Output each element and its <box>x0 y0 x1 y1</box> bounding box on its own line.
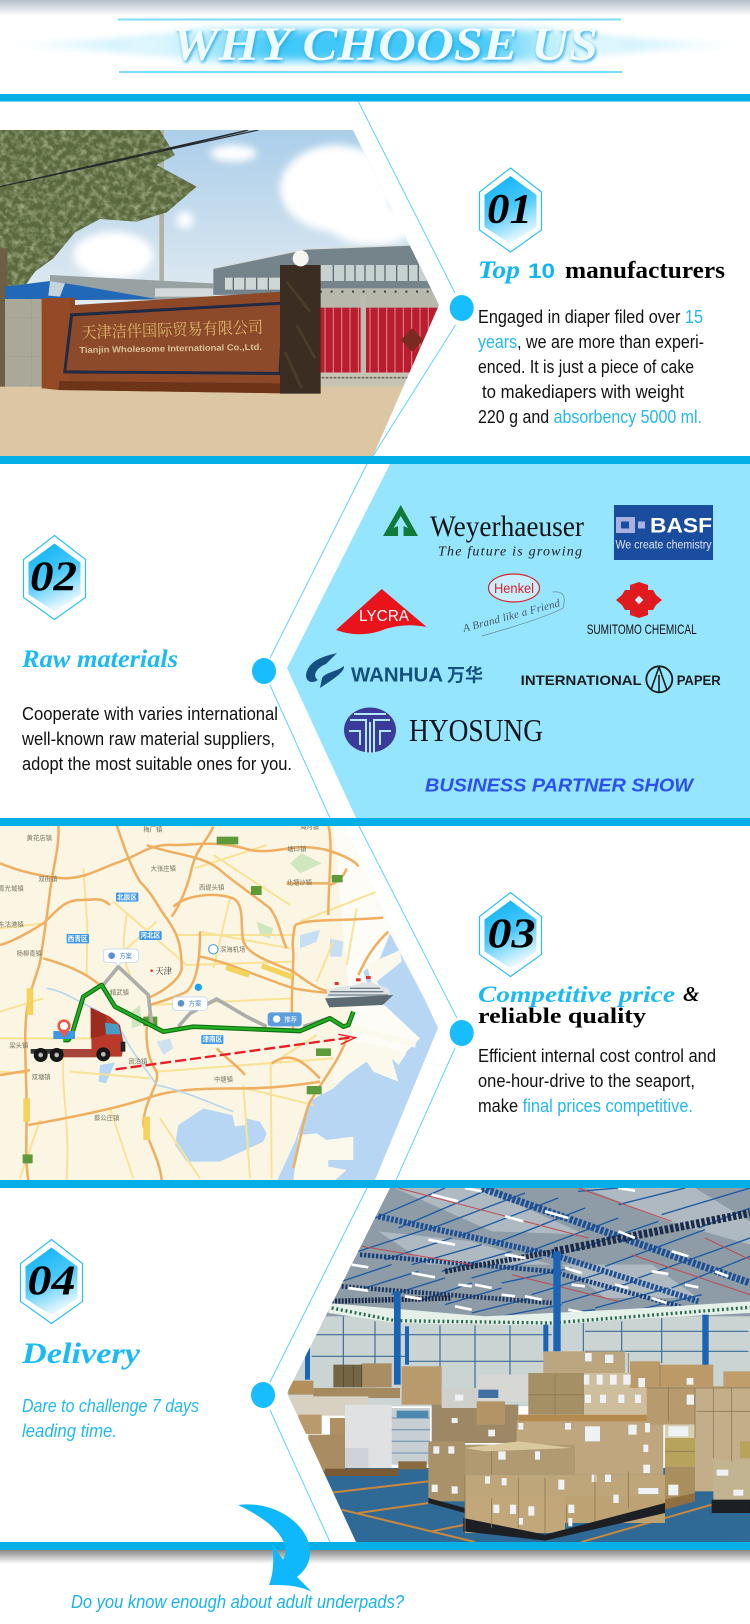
logo: International Paper: PAPER <box>677 672 721 688</box>
map place labels: 梁头镇 <box>9 1041 29 1050</box>
sign text <box>79 318 263 355</box>
map place labels: 西堤头镇 <box>199 882 225 891</box>
heading: reliable quality: reliable quality <box>478 1003 646 1028</box>
port land <box>353 1025 417 1048</box>
section 2 connector line and dot <box>252 464 367 818</box>
map district badges <box>67 892 223 1044</box>
map place labels: 双街镇 <box>38 874 58 883</box>
caption: business partner show: BUSINESS PARTNER SHOW <box>425 775 695 796</box>
purlins <box>342 1188 750 1316</box>
map district badges: 河北区 <box>140 931 161 940</box>
logo: Weyerhaeuser: Weyerhaeuser <box>430 510 584 543</box>
sign text: 天津洁伴国际贸易有限公司 <box>81 318 263 342</box>
water <box>99 930 440 1182</box>
body text: to makediapers with weight <box>482 382 684 402</box>
body text: make final prices competitive. <box>478 1096 693 1116</box>
map place labels: 精武镇 <box>110 987 130 996</box>
section 4 text panel <box>20 1240 199 1441</box>
pallet stacks <box>288 1351 750 1541</box>
ground <box>0 386 404 456</box>
route badges: 推荐 <box>284 1015 298 1024</box>
body text: Engaged in diaper filed over 15 <box>478 307 703 327</box>
hexagon 04: 04 <box>27 1258 76 1304</box>
hexagon 04 <box>20 1240 82 1324</box>
pin <box>53 1019 75 1039</box>
wall <box>285 1316 750 1406</box>
body text: 220 g and absorbency 5000 ml. <box>478 407 702 427</box>
body text: enced. It is just a piece of cake <box>478 357 694 377</box>
logo: Lycra <box>336 589 427 634</box>
logo: International Paper: INTERNATIONAL <box>521 672 642 688</box>
map place labels: 杨柳青镇 <box>17 949 43 958</box>
hexagon 01: 01 <box>487 187 532 233</box>
map district badges: 北辰区 <box>117 892 137 901</box>
carton labels <box>432 1353 743 1526</box>
ceiling lights <box>348 1188 728 1317</box>
title: WHY CHOOSE US <box>172 18 598 71</box>
heading: top 10 manufacturers <box>478 257 725 284</box>
heading: competitive price: Competitive price <box>478 982 675 1007</box>
section 3 map <box>0 822 447 1182</box>
left grey wall <box>5 299 43 389</box>
tree <box>0 125 197 392</box>
hexagon 03: 03 <box>487 912 536 958</box>
map place labels: 塘口镇 <box>287 844 307 853</box>
back left building <box>50 275 213 300</box>
highway shields <box>23 837 343 1163</box>
section 4 photo: warehouse <box>285 1188 750 1545</box>
route badges: 方案 <box>189 999 202 1008</box>
wall ribs <box>312 1316 748 1388</box>
map place labels: 黄花店镇 <box>27 833 53 842</box>
grey alternative routes <box>103 967 330 1027</box>
body text: well-known raw material suppliers, <box>21 729 275 749</box>
columns <box>305 1251 709 1385</box>
section 1 photo: factory gate <box>0 125 443 462</box>
green areas <box>132 853 322 1028</box>
map place labels: 梅厂镇 <box>143 825 163 834</box>
trusses <box>332 1188 750 1308</box>
body text: years, we are more than experi- <box>478 332 704 352</box>
minor roads <box>0 845 377 1180</box>
stack edges <box>465 1353 750 1533</box>
bottom shadow band <box>0 1550 750 1564</box>
body text: adopt the most suitable ones for you. <box>22 754 292 774</box>
body text <box>22 1396 199 1441</box>
logo: Henkel: Henkel <box>494 580 534 596</box>
logo: Wanhua: WANHUA <box>351 665 443 687</box>
heading: top 10 manufacturers: 10 <box>528 260 555 283</box>
body text: Dare to challenge 7 days <box>22 1396 199 1416</box>
route badges: 方案 <box>119 951 133 960</box>
map place labels: 北塘沙镇 <box>287 877 313 886</box>
closing question: Do you know enough about adult underpads? <box>71 1592 404 1612</box>
blue roof <box>5 281 157 301</box>
logo: Wanhua: 万华 <box>447 666 483 686</box>
map place labels: 蔡公庄镇 <box>94 1113 120 1122</box>
logo: Sumitomo Chemical <box>587 582 697 637</box>
map place labels: 大张庄镇 <box>151 864 177 873</box>
main grey building <box>213 245 443 295</box>
red pipes <box>362 1188 750 1301</box>
eave band <box>328 1301 750 1325</box>
hexagon 03 <box>480 892 542 976</box>
sign text: Tianjin Wholesome International Co.,Ltd. <box>79 342 262 355</box>
icon: red truck <box>31 1008 125 1062</box>
logo: International Paper <box>521 666 721 692</box>
map place labels: 双塘镇 <box>32 1072 51 1081</box>
logo: Weyerhaeuser <box>383 505 584 560</box>
section 2 partner panel <box>287 464 750 818</box>
map district badges: 津南区 <box>202 1035 223 1044</box>
heading: raw materials: Raw materials <box>21 646 178 673</box>
logo: BASF <box>614 505 713 560</box>
section 3 text panel <box>478 892 716 1116</box>
major roads <box>0 825 388 1180</box>
wall and sign <box>42 292 286 393</box>
logo: BASF: We create chemistry <box>616 540 712 552</box>
logo: Hyosung <box>344 708 543 753</box>
body text <box>478 307 704 427</box>
logo: BASF: BASF <box>650 515 712 538</box>
title glow <box>0 30 750 61</box>
map place labels <box>0 822 320 1122</box>
logo: Hyosung: HYOSUNG <box>409 712 543 748</box>
map place labels: 团泊镇 <box>128 1056 148 1065</box>
section 2 text panel <box>21 536 292 774</box>
route badges <box>103 949 302 1026</box>
logo: Sumitomo Chemical: SUMITOMO CHEMICAL <box>587 621 697 637</box>
gate column <box>280 265 321 394</box>
map place labels: 海河镇 <box>300 822 320 831</box>
title rules <box>118 20 622 72</box>
logo: Lycra: LYCRA <box>359 608 409 625</box>
heading: delivery: Delivery <box>21 1337 141 1370</box>
body text: Cooperate with varies international <box>22 704 278 724</box>
logo: Wanhua <box>306 653 483 688</box>
red dashed arrow <box>116 1037 352 1069</box>
body text: one-hour-drive to the seaport, <box>478 1071 695 1091</box>
heading: top 10 manufacturers: manufacturers <box>565 258 725 284</box>
arrow pointing down <box>238 1504 312 1592</box>
map place labels: 天津 <box>155 966 173 976</box>
icon: cruise ship <box>325 976 393 1007</box>
body text: leading time. <box>22 1421 117 1441</box>
hexagon 02: 02 <box>30 554 77 600</box>
section 4 connector line and dot <box>251 1188 367 1542</box>
hexagon 01 <box>480 168 542 252</box>
map place labels: 中塘镇 <box>214 1075 234 1084</box>
header band <box>0 0 750 72</box>
map district badges: 西青区 <box>68 934 88 943</box>
body text <box>21 704 292 774</box>
ampersand: & <box>683 982 700 1006</box>
logo: Henkel: A Brand like a Friend <box>461 597 562 635</box>
hexagon 02 <box>24 536 86 620</box>
roof panels <box>378 1188 750 1298</box>
body text <box>478 1046 716 1116</box>
body text: Efficient internal cost control and <box>478 1046 716 1066</box>
gate <box>318 288 443 308</box>
section 3 connector line and dot <box>359 826 474 1180</box>
logo: Weyerhaeuser: The future is growing <box>438 544 582 560</box>
floor <box>305 1468 750 1545</box>
logo: Henkel <box>461 574 564 636</box>
section 1 text panel <box>478 168 725 427</box>
green main route <box>63 985 353 1040</box>
heading: top 10 manufacturers: Top <box>478 257 520 284</box>
map place labels: 滨海机场 <box>220 945 245 954</box>
section 1 connector line and dot <box>358 101 474 456</box>
